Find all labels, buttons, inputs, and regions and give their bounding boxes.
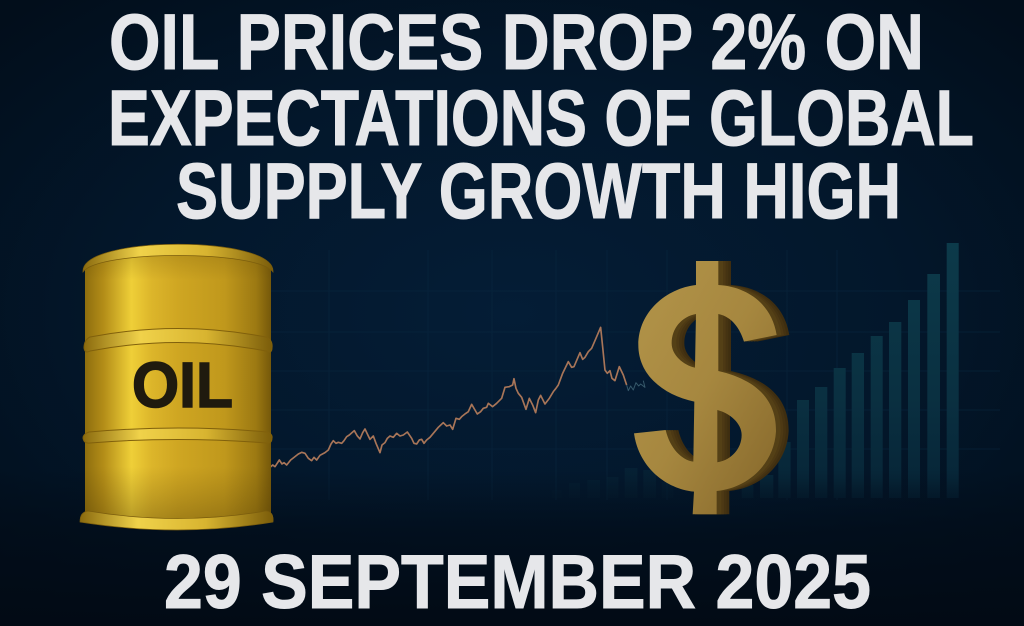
barrel lower band [83, 428, 272, 443]
icon: gold oil barrel [80, 244, 273, 530]
icon: gold dollar sign [634, 261, 789, 514]
title [108, 0, 974, 235]
barrel label: OIL [132, 349, 233, 421]
barrel body [85, 247, 271, 522]
line chart: oil price [270, 327, 645, 467]
floor shading [0, 470, 1024, 626]
barrel upper band [84, 328, 272, 352]
date: 29 SEPTEMBER 2025 [164, 540, 871, 625]
bar chart [552, 243, 959, 498]
barrel base rim [80, 511, 273, 530]
barrel bottom rim [80, 511, 273, 529]
barrel top rim [83, 244, 273, 272]
